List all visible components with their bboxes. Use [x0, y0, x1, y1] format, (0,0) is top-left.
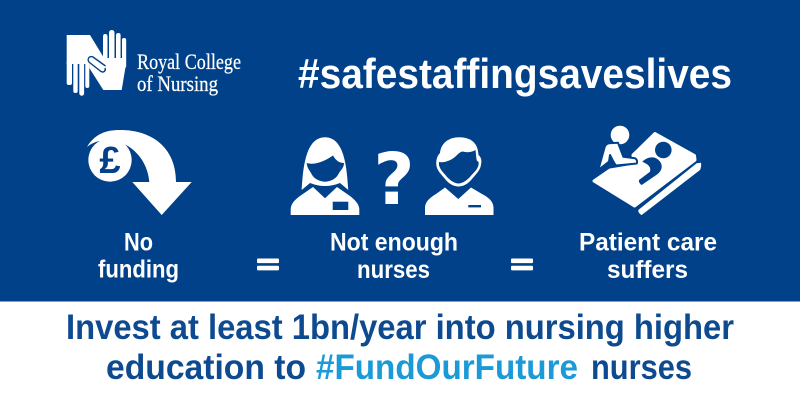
label: patient care suffers: Patient care: [579, 228, 717, 256]
icon: pound coin with falling arrow: £: [99, 140, 121, 182]
icon: nurse tending patient in bed: [594, 126, 701, 215]
label: not enough nurses: nurses: [357, 256, 430, 284]
blue panel: [0, 0, 800, 302]
label: not enough nurses: Not enough: [330, 228, 458, 256]
icon: question mark: ?: [373, 138, 415, 221]
label: patient care suffers: suffers: [607, 256, 688, 284]
call to action: education to: [106, 348, 306, 387]
icon: pound coin with falling arrow: [87, 130, 192, 215]
equals sign: [511, 258, 533, 270]
label: no funding: [98, 228, 179, 284]
label: no funding: No: [124, 228, 153, 256]
call to action: [66, 308, 734, 387]
label: no funding: funding: [98, 256, 179, 284]
call to action: #FundOurFuture: [316, 348, 578, 387]
icon: RCN hands logo: [67, 30, 126, 96]
icon: male nurse: [425, 137, 494, 215]
logo wordmark: Royal College: [137, 49, 241, 74]
heading hashtag: #safestaffingsaveslives: [298, 50, 732, 97]
label: not enough nurses: [330, 228, 458, 284]
label: patient care suffers: [579, 228, 717, 284]
icon: female nurse: [291, 137, 359, 215]
call to action: Invest at least 1bn/year into nursing higher: [66, 308, 734, 347]
call to action: nurses: [591, 348, 692, 387]
logo wordmark: [137, 49, 241, 96]
logo wordmark: of Nursing: [137, 71, 218, 96]
equals sign: [257, 258, 279, 270]
